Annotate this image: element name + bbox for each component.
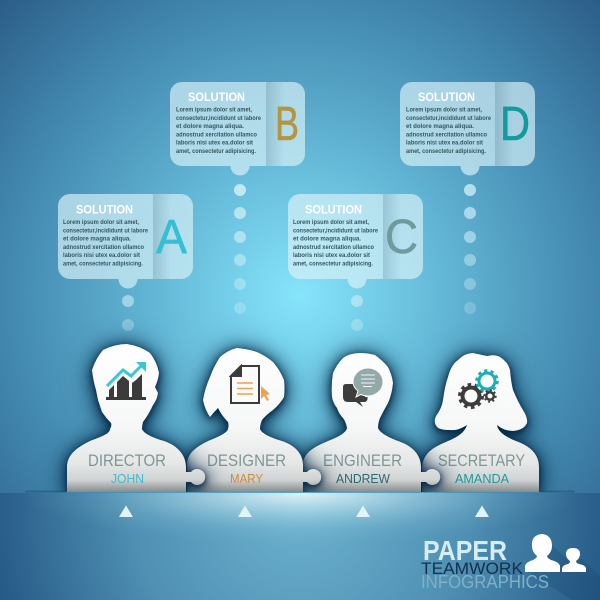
panel: solution A: A xyxy=(156,211,187,264)
panel: solution A: laboris nisi utex ea.dolor sit xyxy=(63,252,141,259)
panel: solution C xyxy=(288,194,423,288)
panel: solution D: SOLUTION xyxy=(418,90,475,104)
panel: solution B: amet, consectetur adipisicing. xyxy=(176,148,256,155)
panel: solution D: laboris nisi utex ea.dolor sit xyxy=(406,140,484,147)
panel: solution D: amet, consectetur adipisicing. xyxy=(406,148,486,155)
panel: solution D: D xyxy=(500,98,530,151)
shelf xyxy=(0,490,600,600)
logo text xyxy=(421,535,549,592)
panel: solution C: C xyxy=(385,211,418,264)
connector dots: A xyxy=(122,295,134,331)
panel: solution B xyxy=(170,82,305,176)
panel: solution C: amet, consectetur adipisicing. xyxy=(293,260,373,268)
panel: solution B: consectetur,incididunt ut labore xyxy=(176,115,261,122)
panel: solution A: et dolore magna aliqua. xyxy=(63,236,131,243)
name: john: JOHN xyxy=(111,471,144,486)
panel: solution A xyxy=(58,194,193,288)
panel: solution C: et dolore magna aliqua. xyxy=(293,236,361,243)
logo icon: two people xyxy=(525,534,600,600)
panel: solution D: adnostrud xercitation ullamco xyxy=(406,131,487,138)
connector dots: B xyxy=(234,184,246,314)
panel: solution D: et dolore magna aliqua. xyxy=(406,123,474,130)
panel: solution C: SOLUTION xyxy=(305,202,362,216)
icon: document with cursor xyxy=(231,366,270,403)
panel: solution A: SOLUTION xyxy=(76,202,133,216)
panel: solution B: Lorem ipsum dolor sit amet, xyxy=(176,106,252,114)
panel: solution C: laboris nisi utex ea.dolor sit xyxy=(293,252,371,259)
panel: solution D: consectetur,incididunt ut labore xyxy=(406,115,491,122)
panel: solution D: Lorem ipsum dolor sit amet, xyxy=(406,106,482,114)
person: secretary xyxy=(422,353,539,492)
panel: solution B: SOLUTION xyxy=(188,90,245,104)
icon: speech bubbles xyxy=(343,368,383,407)
role: engineer: ENGINEER xyxy=(323,452,402,470)
icon: growth chart xyxy=(106,362,146,400)
panel: solution C: consectetur,incididunt ut labore xyxy=(293,227,378,234)
logo text: TEAMWORK xyxy=(421,559,524,578)
logo text: PAPER xyxy=(423,535,507,566)
role: director: DIRECTOR xyxy=(88,452,166,470)
connector dots: D xyxy=(464,184,476,314)
panel: solution C: adnostrud xercitation ullamco xyxy=(293,244,374,251)
role: secretary: SECRETARY xyxy=(438,452,525,470)
connector dots: C xyxy=(351,295,363,331)
panel: solution A: adnostrud xercitation ullamco xyxy=(63,244,144,251)
panel: solution A: consectetur,incididunt ut labore xyxy=(63,227,148,234)
person: designer xyxy=(187,348,321,492)
panel: solution B: adnostrud xercitation ullamco xyxy=(176,131,257,138)
person: engineer xyxy=(303,353,440,492)
panel: solution B: et dolore magna aliqua. xyxy=(176,123,244,130)
person: director xyxy=(67,344,205,492)
panel: solution B: B xyxy=(275,98,299,151)
panel: solution A: Lorem ipsum dolor sit amet, xyxy=(63,219,139,226)
role: designer: DESIGNER xyxy=(207,452,286,470)
panel: solution D xyxy=(400,82,535,176)
name: amanda: AMANDA xyxy=(455,471,509,486)
panel: solution C: Lorem ipsum dolor sit amet, xyxy=(293,219,369,226)
name: andrew: ANDREW xyxy=(336,471,391,486)
marker triangles xyxy=(119,506,489,517)
panel: solution A: amet, consectetur adipisicing. xyxy=(63,260,143,268)
logo text: INFOGRAPHICS xyxy=(421,572,549,592)
icon: gears xyxy=(460,370,498,408)
name: mary: MARY xyxy=(230,471,263,486)
panel: solution B: laboris nisi utex ea.dolor sit xyxy=(176,140,254,147)
